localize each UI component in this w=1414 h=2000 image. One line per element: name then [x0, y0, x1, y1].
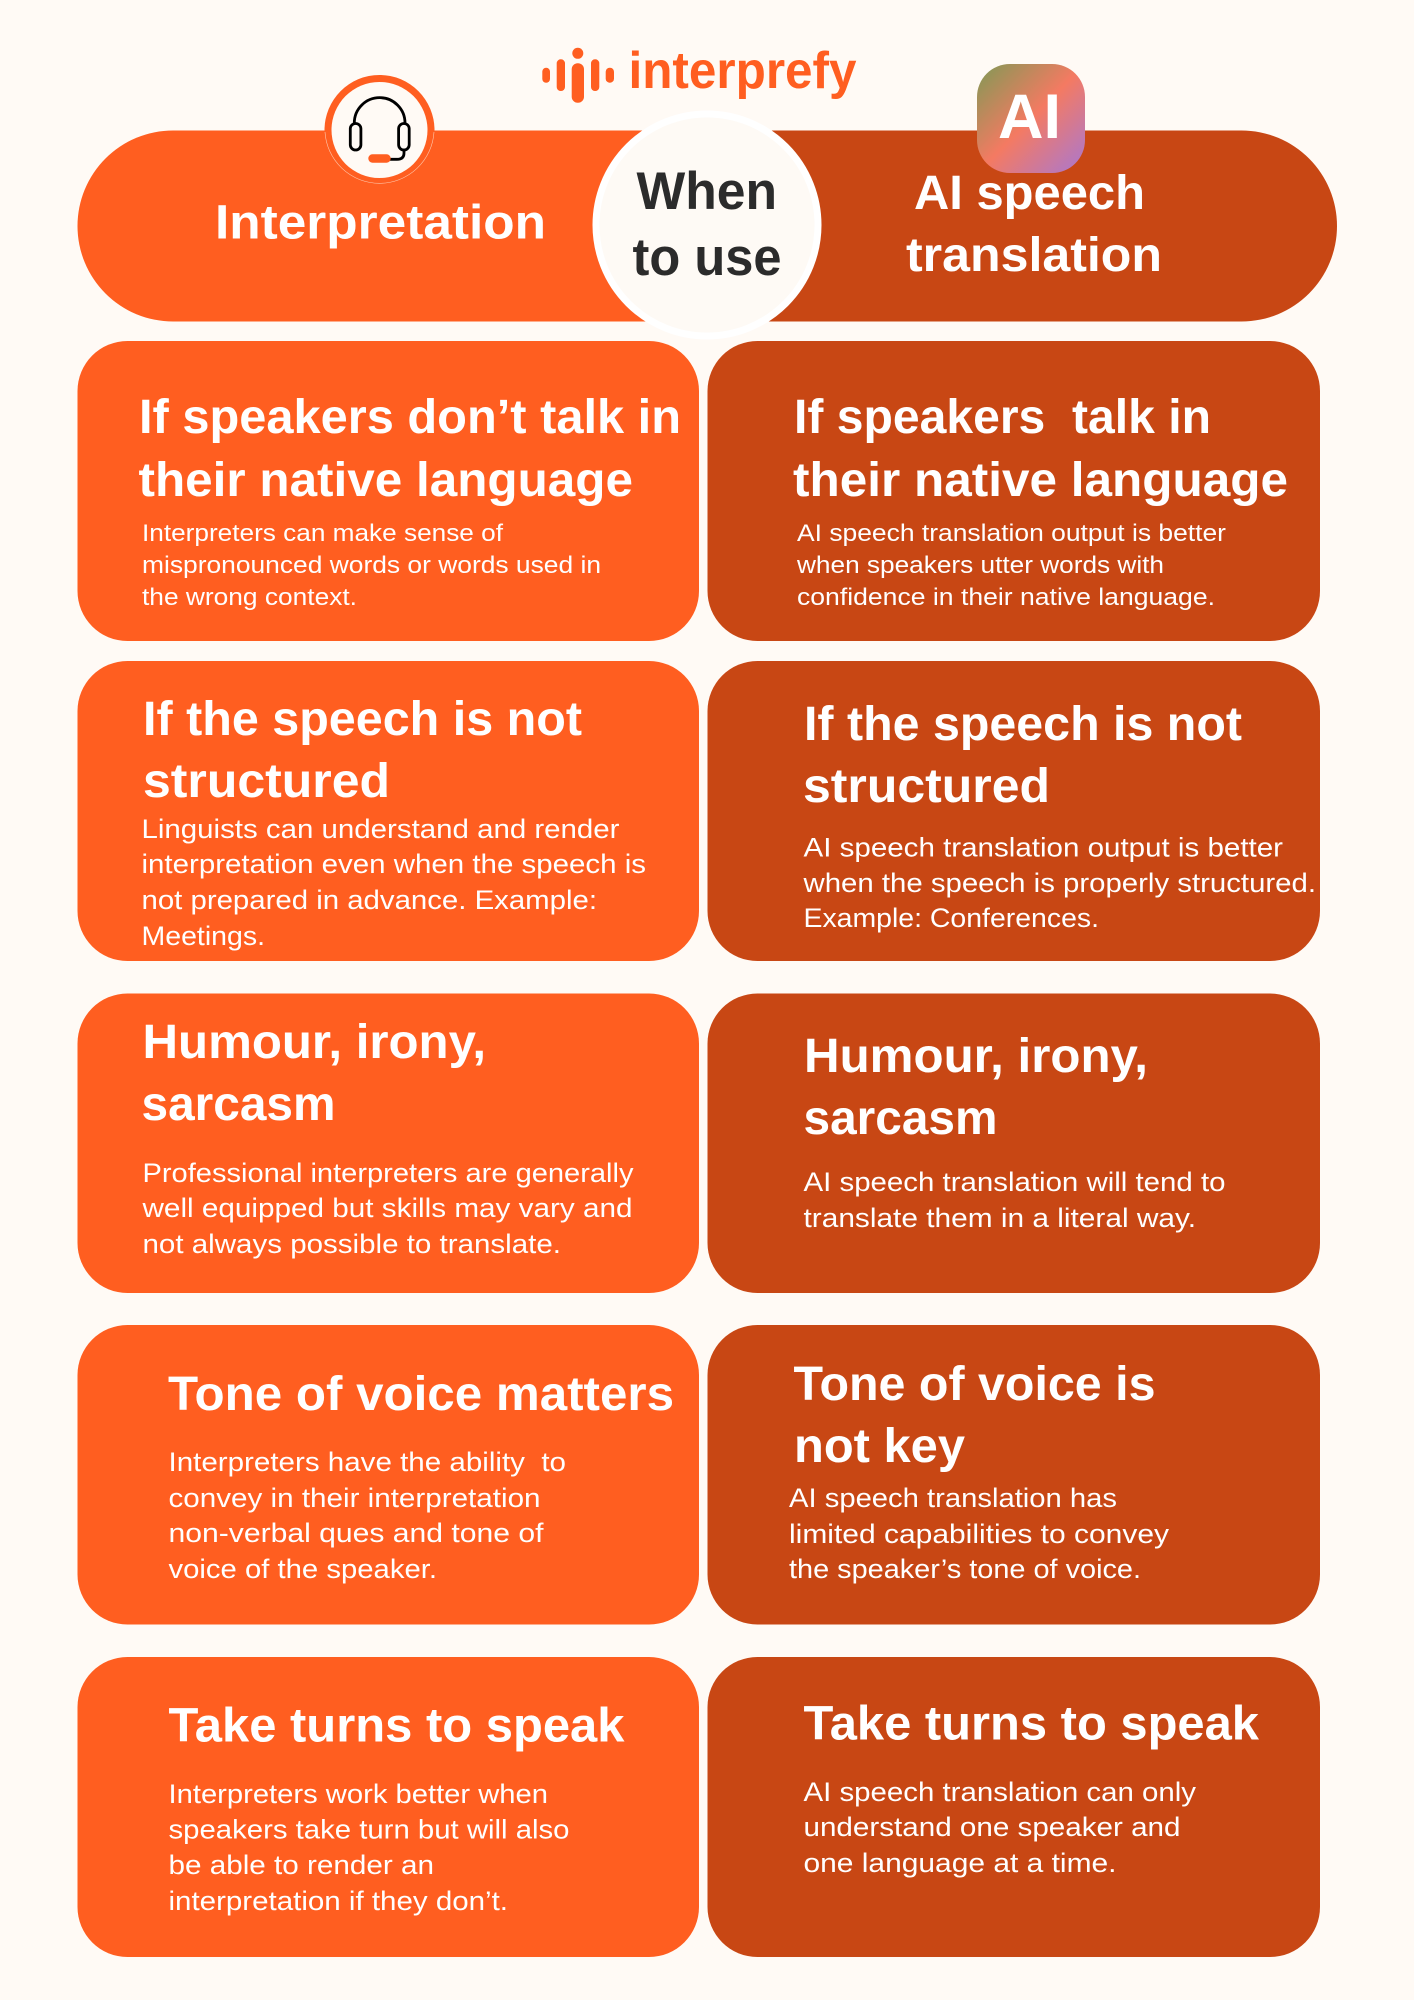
- panel: humour, AI: [708, 994, 1320, 1293]
- icon: AI tile: AI: [998, 82, 1061, 152]
- body text: when the speech is properly structured.: [802, 868, 1316, 898]
- body text: not prepared in advance. Example:: [142, 885, 597, 915]
- body text: interpretation even when the speech is: [142, 849, 646, 879]
- panel: take turns, interpretation: [78, 1657, 699, 1957]
- panel: take turns, AI: [708, 1657, 1320, 1957]
- heading: [803, 698, 1242, 813]
- logo: interprefy: [542, 42, 857, 103]
- body text: convey in their interpretation: [168, 1483, 540, 1513]
- body text: Interpreters can make sense of: [142, 520, 503, 547]
- heading: sarcasm: [804, 1092, 998, 1145]
- body text: [804, 1777, 1197, 1878]
- body text: AI speech translation output is better: [804, 832, 1283, 862]
- heading: structured: [143, 755, 390, 808]
- heading: When to use: [632, 162, 782, 287]
- heading: Humour, irony,: [142, 1016, 486, 1069]
- logo wordmark: interprefy: [628, 42, 857, 100]
- body text: understand one speaker and: [804, 1812, 1180, 1842]
- body text: the wrong context.: [142, 584, 357, 611]
- panel: humour, interpretation: [78, 994, 699, 1293]
- heading: structured: [803, 760, 1050, 813]
- body text: AI speech translation output is better: [797, 520, 1226, 547]
- header band: [78, 64, 1337, 336]
- heading: AI speech translation: [906, 167, 1162, 282]
- heading: [143, 693, 582, 808]
- heading: Take turns to speak: [168, 1700, 625, 1752]
- heading: When to use: to use: [632, 228, 782, 287]
- heading: Tone of voice is: [794, 1358, 1156, 1411]
- body text: [142, 814, 646, 951]
- body text: be able to render an: [168, 1850, 434, 1880]
- body text: not always possible to translate.: [142, 1229, 561, 1259]
- body text: [796, 520, 1226, 611]
- body text: speakers take turn but will also: [168, 1814, 570, 1844]
- body text: [802, 832, 1316, 933]
- body text: [142, 520, 601, 611]
- body text: Meetings.: [142, 921, 265, 951]
- heading: If the speech is not: [804, 698, 1242, 751]
- heading: sarcasm: [142, 1078, 336, 1131]
- body text: Professional interpreters are generally: [142, 1158, 634, 1188]
- body text: [804, 1167, 1226, 1233]
- heading: [142, 1016, 486, 1131]
- panel: tone of voice, interpretation: [78, 1325, 699, 1624]
- heading: their native language: [138, 454, 633, 507]
- badge: when to use: [596, 114, 818, 336]
- heading: Interpretation: Interpretation: [215, 196, 546, 250]
- body text: AI speech translation will tend to: [804, 1167, 1226, 1197]
- heading: Take turns to speak: [804, 1698, 1259, 1750]
- heading: their native language: [793, 454, 1288, 507]
- panel: speakers native, AI: [708, 341, 1320, 641]
- body text: Example: Conferences.: [804, 903, 1099, 933]
- body text: when speakers utter words with: [796, 552, 1164, 579]
- heading: If the speech is not: [143, 693, 582, 746]
- heading: [804, 1030, 1148, 1145]
- heading: Humour, irony,: [804, 1030, 1148, 1083]
- body text: Interpreters work better when: [168, 1779, 548, 1809]
- heading: AI speech translation: AI speech: [914, 167, 1145, 220]
- body text: translate them in a literal way.: [804, 1203, 1196, 1233]
- panel: tone of voice, AI: [708, 1325, 1320, 1624]
- heading: If speakers talk in: [794, 391, 1211, 444]
- heading: not key: [794, 1420, 965, 1473]
- panel: interpretation header: [78, 130, 707, 322]
- body text: one language at a time.: [804, 1848, 1116, 1878]
- body text: AI speech translation can only: [804, 1777, 1197, 1807]
- body text: confidence in their native language.: [797, 584, 1215, 611]
- body text: Linguists can understand and render: [142, 814, 620, 844]
- heading: When to use: When: [636, 162, 777, 221]
- heading: [138, 391, 681, 507]
- heading: [794, 1358, 1156, 1473]
- panel: unstructured speech, interpretation: [78, 661, 699, 961]
- panel: structured speech, AI: [708, 661, 1320, 961]
- body text: non-verbal ques and tone of: [168, 1518, 544, 1548]
- body text: limited capabilities to convey: [789, 1519, 1170, 1549]
- heading: [793, 391, 1288, 507]
- icon: headset: [324, 75, 434, 185]
- panel: AI speech translation header: [707, 130, 1337, 322]
- body text: [789, 1483, 1170, 1584]
- body text: Interpreters have the ability to: [168, 1447, 566, 1477]
- body text: voice of the speaker.: [168, 1554, 437, 1584]
- body text: [168, 1779, 570, 1916]
- heading: If speakers don’t talk in: [139, 391, 681, 444]
- body text: well equipped but skills may vary and: [141, 1193, 632, 1223]
- icon: AI tile: [977, 64, 1085, 173]
- panel: speakers not native, interpretation: [78, 341, 699, 641]
- body text: the speaker’s tone of voice.: [789, 1554, 1141, 1584]
- body text: AI speech translation has: [789, 1483, 1117, 1513]
- heading: Tone of voice matters: [168, 1368, 674, 1421]
- body text: interpretation if they don’t.: [168, 1886, 508, 1916]
- body text: [168, 1447, 566, 1584]
- icon: sound wave bars: [542, 48, 614, 103]
- body text: [141, 1158, 634, 1259]
- heading: AI speech translation: translation: [906, 229, 1162, 282]
- body text: mispronounced words or words used in: [142, 552, 601, 579]
